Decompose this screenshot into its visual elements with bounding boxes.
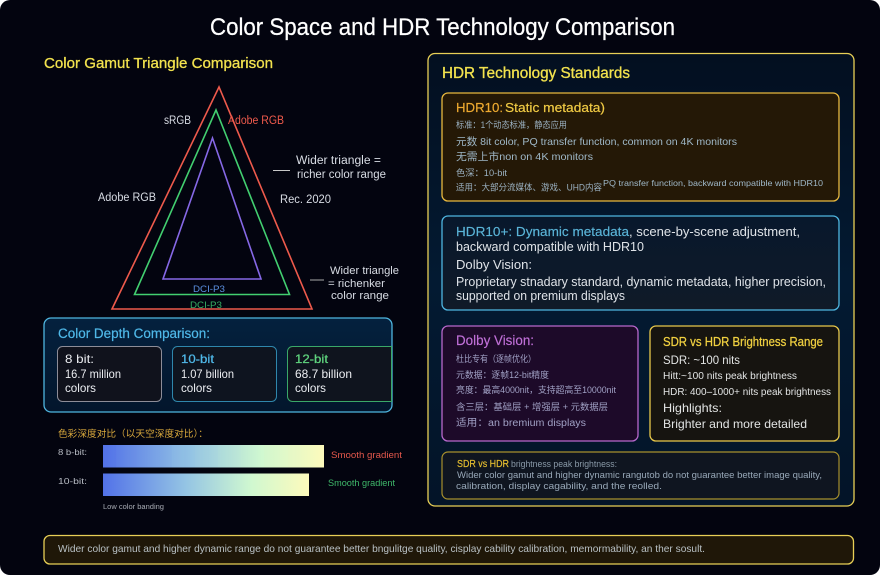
- card: HDR10: PQ transfer function, backward compatible with HDR10: [603, 178, 823, 188]
- card: HDR10: 标准：1个动态标准，静态应用: [456, 119, 567, 130]
- callout: SDR vs HDR note: calibration, display cagability, and the reolled.: [456, 481, 662, 492]
- card: SDR vs HDR brightness: Highlights:: [663, 401, 722, 415]
- card: HDR10+: Proprietary stnadary standard, dynamic metadata, higher precision,: [456, 275, 826, 289]
- label: 8 bit: 8 b-bit:: [58, 448, 87, 457]
- footer callout: [44, 536, 854, 564]
- card: 12 bit: colors: [295, 381, 326, 395]
- card: SDR vs HDR brightness: Hitt:~100 nits peak brightness: [663, 370, 797, 382]
- card: HDR10+: supported on premium displays: [456, 289, 625, 303]
- heading: banding: 色彩深度对比（以天空深度对比）：: [58, 428, 208, 440]
- callout: SDR vs HDR note: Wider color gamut and higher dynamic rangutob do not guarantee better image quality,: [457, 470, 822, 481]
- label: DCI-P3 green: DCI-P3: [190, 300, 222, 311]
- card: 8 bit: 16.7 million: [65, 367, 121, 381]
- card: HDR10+: , scene-by-scene adjustment,: [629, 225, 800, 239]
- label: DCI-P3 blue: DCI-P3: [193, 284, 225, 295]
- card: 12 bit: 12-bit: [295, 352, 329, 366]
- card: HDR10: 元数 8it color, PQ transfer function, common on 4K monitors: [456, 135, 737, 148]
- card: 8 bit: [58, 346, 162, 402]
- note: 10 bit: Smooth gradient: [328, 478, 396, 488]
- triangle: outer red: [112, 87, 312, 309]
- panel: color depth comparison: [44, 318, 392, 412]
- card: SDR vs HDR brightness: Brighter and more detailed: [663, 417, 807, 431]
- callout: SDR vs HDR note: SDR vs HDR: [457, 459, 509, 470]
- callout: SDR vs HDR note: [442, 452, 839, 499]
- panel: HDR technology standards: [428, 54, 854, 506]
- card: Dolby Vision: Dolby Vision:: [456, 333, 534, 348]
- card: HDR10: 色深：10-bit: [456, 167, 508, 178]
- card: SDR vs HDR brightness: SDR: ~100 nits: [663, 353, 740, 367]
- card: Dolby Vision: 适用：an bremium displays: [456, 417, 586, 429]
- card: Dolby Vision: 亮度：最高4000nit，支持超高至10000nit: [456, 384, 616, 395]
- card: 12 bit: [288, 346, 392, 402]
- heading: HDR standards: HDR Technology Standards: [442, 65, 630, 82]
- card: HDR10+: backward compatible with HDR10: [456, 240, 644, 254]
- label: 10 bit: 10-bit:: [58, 477, 87, 486]
- label: sRGB: sRGB: [164, 115, 191, 127]
- card: HDR10: [442, 93, 839, 201]
- footer callout: Wider color gamut and higher dynamic range do not guarantee better bngulitge quality, cisplay cability calibration, memormability, an ther sosult.: [58, 543, 705, 555]
- card: HDR10: 适用：大部分流媒体、游戏、UHD内容: [456, 182, 602, 192]
- callout: wider triangle lower: Wider triangle: [330, 265, 399, 277]
- card: 8 bit: 8 bit:: [65, 352, 94, 366]
- callout: wider triangle upper: richer color range: [297, 169, 386, 181]
- callout: SDR vs HDR note: brightness peak brightness:: [511, 459, 617, 470]
- chart: color banding comparison: [58, 428, 403, 511]
- card: 8 bit: colors: [65, 381, 96, 395]
- heading: color depth: Color Depth Comparison:: [58, 326, 210, 341]
- bar: 8 bit banded: [103, 445, 324, 468]
- chart: gamut triangles: [112, 87, 312, 309]
- caption: low color banding: Low color banding: [103, 504, 164, 511]
- card: 12 bit: 68.7 billion: [295, 367, 352, 381]
- callout: wider triangle upper: [273, 155, 386, 181]
- card: HDR10: HDR10:: [456, 100, 503, 115]
- card: Dolby Vision: 含三层：基础层 + 增强层 + 元数据层: [456, 401, 608, 412]
- card: Dolby Vision: 杜比专有（逐帧优化）: [456, 353, 536, 364]
- card: SDR vs HDR brightness: SDR vs HDR Brightness Range: [663, 335, 823, 349]
- heading: gamut: Color Gamut Triangle Comparison: [44, 55, 273, 72]
- card: HDR10+: [442, 216, 839, 310]
- label: Adobe RGB: Adobe RGB: [98, 192, 156, 204]
- card: 10 bit: colors: [181, 381, 212, 395]
- panel: color gamut triangle comparison: [44, 55, 399, 311]
- triangle: inner purple: [163, 138, 261, 279]
- label: Adobe RGB red: Adobe RGB: [228, 115, 284, 127]
- card: HDR10: 无需上市non on 4K monitors: [456, 150, 593, 163]
- callout: wider triangle lower: = richenker: [328, 278, 385, 290]
- card: 10 bit: [172, 346, 276, 402]
- card: 10 bit: 10-bit: [181, 352, 215, 366]
- callout: wider triangle lower: [310, 265, 399, 302]
- label: Rec. 2020: Rec. 2020: [280, 194, 331, 206]
- callout: wider triangle lower: color range: [331, 290, 389, 302]
- card: SDR vs HDR brightness: [650, 326, 839, 441]
- card: HDR10+: HDR10+: Dynamic metadata: [456, 224, 630, 239]
- card: HDR10+: Dolby Vision:: [456, 258, 532, 272]
- card: Dolby Vision: 元数据：逐帧12-bit精度: [456, 369, 549, 380]
- card: 10 bit: 1.07 billion: [181, 367, 234, 381]
- bar: 10 bit smooth: [103, 474, 309, 496]
- title: Color Space and HDR Technology Comparison: [210, 14, 675, 41]
- card: Dolby Vision: [442, 326, 638, 441]
- callout: wider triangle upper: Wider triangle =: [296, 155, 381, 167]
- card: SDR vs HDR brightness: HDR: 400–1000+ nits peak brightness: [663, 386, 831, 398]
- note: 8 bit: Smooth gradient: [331, 450, 403, 460]
- card: HDR10: Static metadata): [505, 100, 605, 115]
- triangle: middle green: [134, 110, 290, 294]
